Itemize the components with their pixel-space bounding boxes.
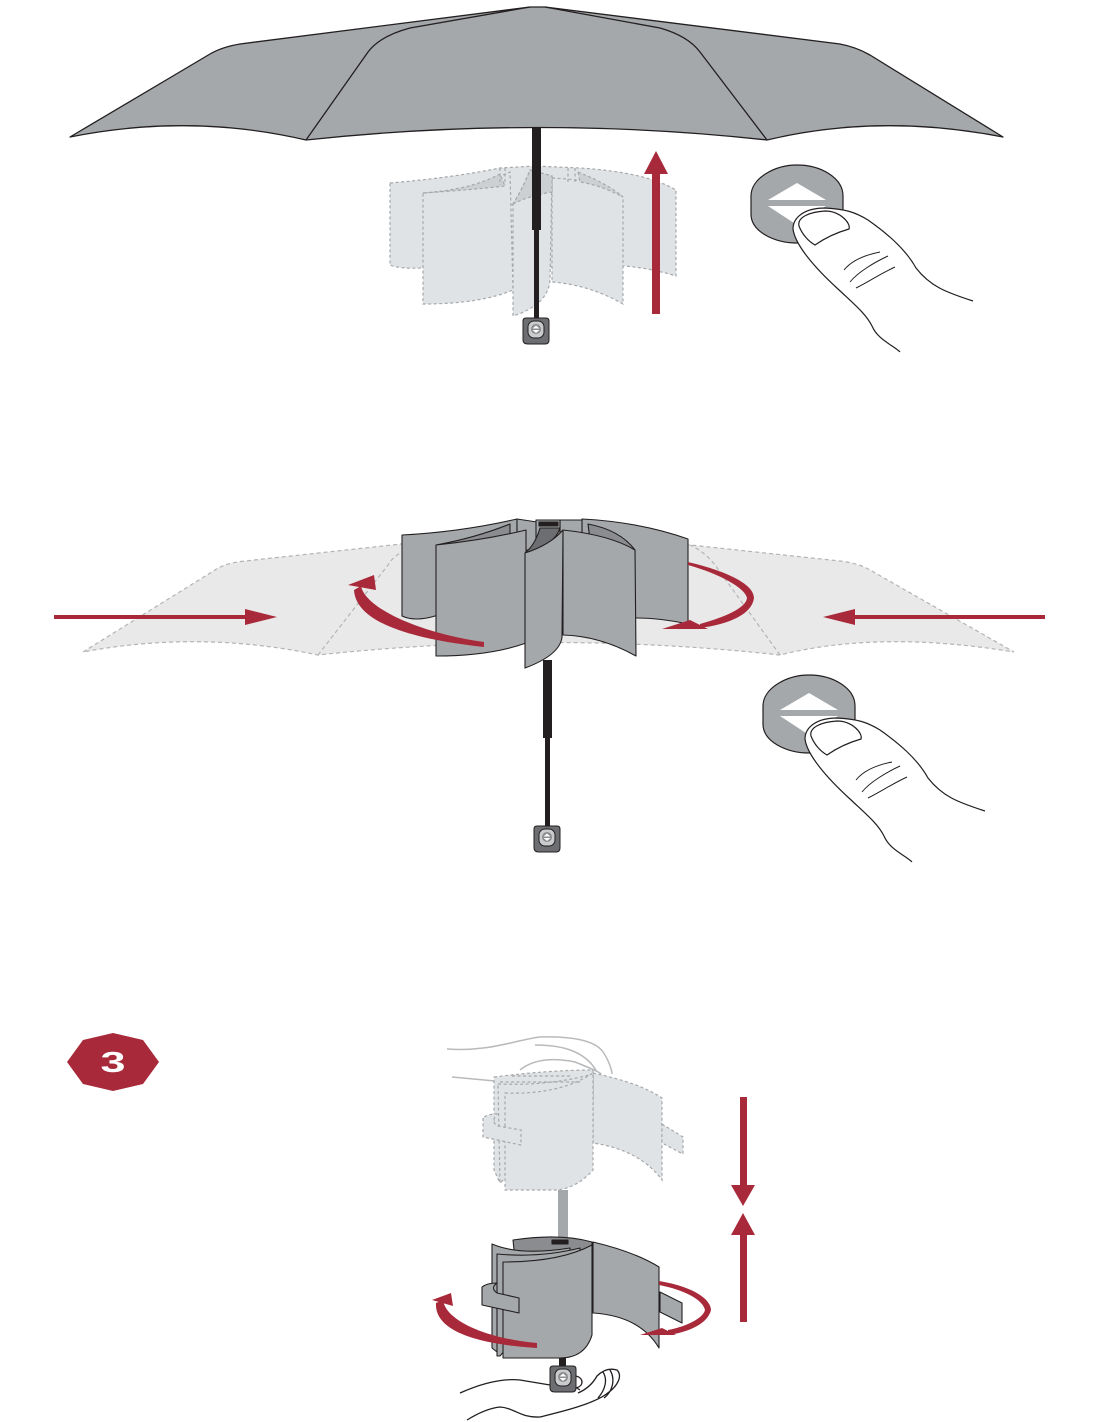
faded folded panels	[390, 166, 676, 316]
icon: handle	[523, 318, 549, 344]
shaft	[532, 127, 541, 320]
lower hand	[460, 1369, 619, 1420]
step badge: 3	[100, 1047, 126, 1079]
shaft	[543, 660, 552, 828]
icon: finger pressing button	[763, 675, 985, 862]
icon: handle	[534, 826, 560, 852]
icon: finger pressing button	[751, 165, 973, 352]
step badge	[67, 1033, 159, 1091]
icon: handle	[550, 1366, 576, 1392]
arrow: rotate right	[662, 562, 754, 629]
folded canopy panels	[402, 519, 688, 668]
panel: step 2 closing canopy	[54, 519, 1045, 862]
open canopy	[70, 7, 1003, 140]
arrow: lift up	[644, 151, 668, 314]
faded folded umbrella	[483, 1070, 683, 1190]
arrow: press up	[731, 1213, 755, 1322]
arrow: push in from right	[823, 609, 1045, 625]
arrow: rotate right	[640, 1281, 711, 1335]
panel: step 3 collapsing shaft	[67, 1033, 755, 1420]
panel: step 1 open umbrella	[70, 7, 1003, 352]
arrow: rotate left	[348, 575, 484, 647]
shaft	[558, 1190, 568, 1240]
connector under umbrella	[559, 1358, 566, 1368]
faded upper hand	[447, 1037, 612, 1081]
arrow: rotate left	[432, 1293, 537, 1348]
arrow: press down	[731, 1097, 755, 1206]
faded open canopy	[83, 530, 1014, 655]
arrow: push in from left	[54, 609, 277, 625]
folded umbrella	[482, 1237, 682, 1358]
